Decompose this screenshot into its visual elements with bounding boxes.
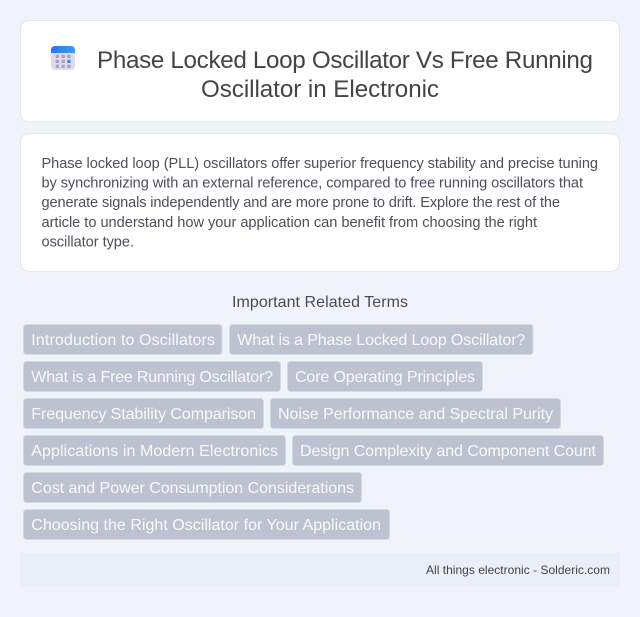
tag: design complexity [292, 436, 604, 466]
tag: introduction: Introduction to Oscillators [31, 332, 215, 349]
text block: summary: Phase locked loop (PLL) oscillators offer superior frequency stability and precise tuning [42, 156, 598, 172]
tag: cost and power [24, 472, 362, 502]
tag: what is free running: What is a Free Running Oscillator? [31, 369, 273, 386]
text block: summary: oscillator type. [42, 234, 134, 250]
tag: noise: Noise Performance and Spectral Purity [278, 406, 553, 423]
tag: introduction [24, 324, 222, 354]
tag: noise [270, 398, 560, 428]
tag: stability: Frequency Stability Comparison [31, 406, 256, 423]
tag: choosing [24, 510, 390, 540]
text block: summary: article to understand how your application can benefit from choosing the right [42, 215, 537, 231]
title: Oscillator in Electronic [201, 76, 439, 103]
footer [20, 553, 620, 587]
text block: summary [42, 156, 598, 250]
tag: cost and power: Cost and Power Consumption Considerations [31, 480, 354, 497]
tag: applications: Applications in Modern Electronics [31, 443, 278, 460]
tag: applications [24, 436, 286, 466]
text block: summary: by synchronizing with an external reference, compared to free running oscillators that [42, 176, 583, 192]
panel: title card [20, 20, 620, 122]
tag: what is free running [24, 362, 280, 392]
title: Phase Locked Loop Oscillator Vs Free Running [97, 47, 593, 74]
icon: calendar grid [51, 46, 75, 70]
tag: choosing: Choosing the Right Oscillator for Your Application [31, 517, 381, 534]
tag: what is PLL: What is a Phase Locked Loop Oscillator? [237, 332, 525, 349]
tag: principles [288, 362, 482, 392]
tag: principles: Core Operating Principles [295, 369, 475, 386]
tag: design complexity: Design Complexity and Component Count [300, 443, 597, 460]
tag: what is PLL [230, 324, 533, 354]
footer: All things electronic - Solderic.com [426, 563, 610, 577]
title [97, 47, 593, 103]
heading: related terms: Important Related Terms [232, 294, 408, 311]
tag list: related terms [24, 324, 604, 540]
text block: summary: generate signals independently and are more prone to drift. Explore the rest of the [42, 195, 560, 211]
panel: summary paragraph [20, 134, 620, 272]
tag: stability [24, 398, 264, 428]
